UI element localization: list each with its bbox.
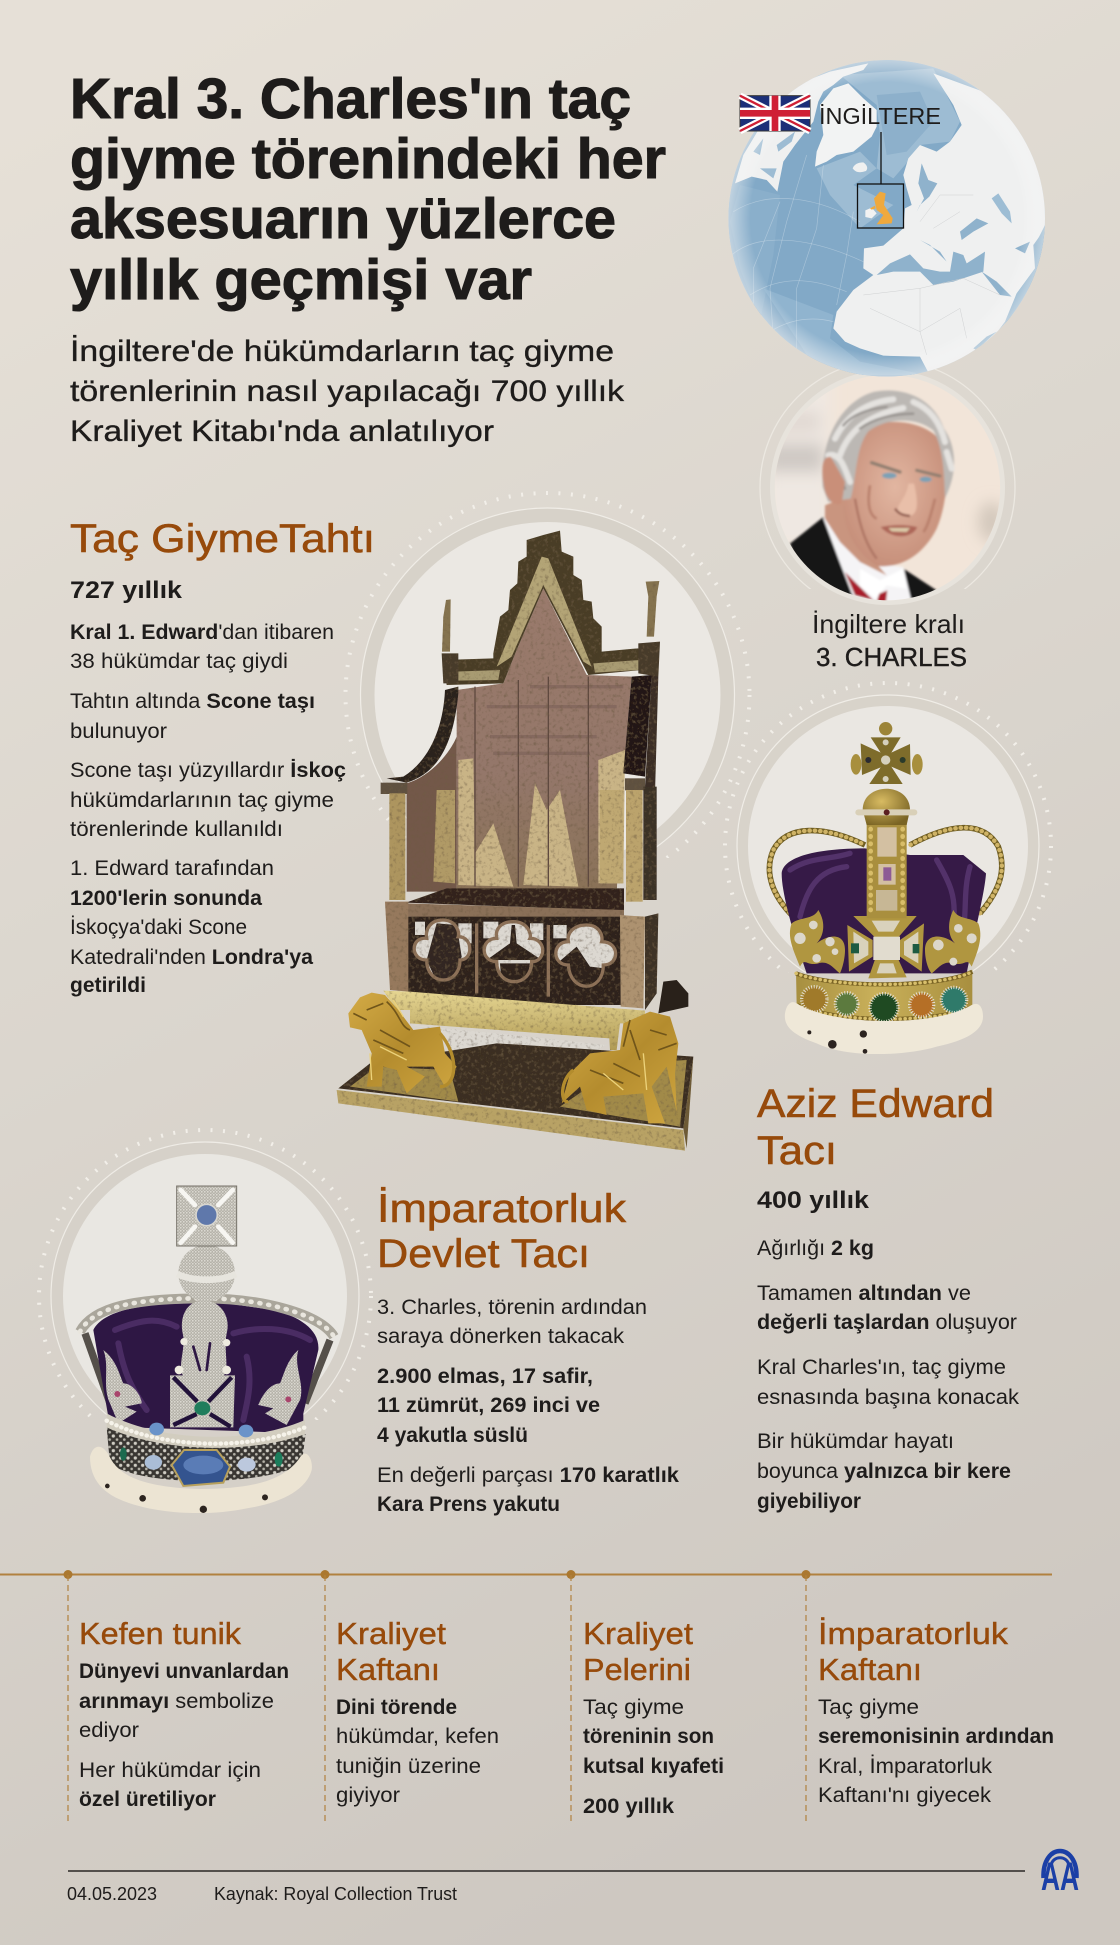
panel: Kefen tunik [79,1616,289,1811]
panel: Kraliyet Kaftanı: tuniğin üzerine [336,1755,481,1778]
text block: throne facts: Kral 1. Edward'dan itibaren [70,621,334,644]
text block: throne facts: Katedrali'nden Londra'ya [70,946,313,969]
heading: St Edward [757,1082,994,1173]
panel: St Edward crown backdrop [725,683,1051,1009]
text block: St Edward facts: Tamamen altından ve [757,1282,971,1305]
panel: Kraliyet Kaftanı: Kaftanı [336,1652,440,1687]
panel: Kraliyet Pelerini: Taç giyme [583,1696,684,1719]
text block: throne facts: 1. Edward tarafından [70,857,274,880]
age: St Edward: 400 yıllık [757,1187,870,1214]
text block: throne facts: Tahtın altında Scone taşı [70,690,315,713]
title: Kral 3. Charles'ın taç [70,67,631,131]
map label: İNGİLTERE [819,103,941,129]
subtitle: törenlerinin nasıl yapılacağı 700 yıllık [70,375,625,408]
panel: Kraliyet Kaftanı: Kraliyet [336,1616,446,1651]
panel: Kraliyet Kaftanı: Dini törende [336,1696,457,1719]
icon: AA logo: AA [1041,1855,1079,1899]
panel: Kraliyet Pelerini: Kraliyet [583,1616,693,1651]
panel: İmparatorluk Kaftanı: Kral, İmparatorluk [818,1755,993,1778]
map callout box [858,132,904,228]
text block: Imperial crown facts: 11 zümrüt, 269 inci ve [377,1394,600,1417]
text block: throne facts: bulunuyor [70,720,167,743]
text block: St Edward facts: giyebiliyor [757,1490,861,1513]
subtitle: Kraliyet Kitabı'nda anlatılıyor [70,415,494,448]
panel: İmparatorluk Kaftanı: Kaftanı [818,1652,922,1687]
text block: Imperial crown facts: 3. Charles, törenin ardından [377,1296,647,1319]
text block: throne facts: 1200'lerin sonunda [70,887,262,910]
portrait caption: 3. CHARLES [816,642,967,672]
text block: throne facts: İskoçya'daki Scone [70,916,247,939]
panel: İmparatorluk Kaftanı [818,1616,1054,1807]
panel: Kraliyet Pelerini: 200 yıllık [583,1795,674,1818]
heading: Imperial crown [377,1186,627,1276]
panel: Imperial crown backdrop [37,1128,373,1420]
heading: St Edward: Tacı [757,1129,837,1173]
title: aksesuarın yüzlerce [70,187,616,251]
portrait caption: İngiltere kralı [812,609,965,639]
panel: Kraliyet Pelerini: töreninin son [583,1725,714,1748]
heading: throne: Taç GiymeTahtı [70,517,375,561]
timeline rule [0,1570,1052,1821]
text block: throne facts: Scone taşı yüzyıllardır İskoç [70,759,346,782]
icon: UK flag [740,96,810,131]
text block: St Edward facts: değerli taşlardan oluşuyor [757,1311,1017,1334]
title: giyme törenindeki her [70,127,666,191]
text block: throne facts: 38 hükümdar taç giydi [70,650,288,673]
text block: throne facts: törenlerinde kullanıldı [70,818,283,841]
panel: İmparatorluk Kaftanı: Kaftanı'nı giyecek [818,1784,992,1807]
text block: throne facts [70,621,346,997]
illustration: coronation throne [337,531,693,1151]
footer [67,1871,1025,1904]
panel: İmparatorluk Kaftanı: Taç giyme [818,1696,919,1719]
panel: St Edward text [757,1082,1020,1513]
age: throne: 727 yıllık [70,577,183,604]
panel: Kefen tunik: Kefen tunik [79,1616,242,1651]
portrait: King Charles [776,376,1000,600]
panel: throne text [70,517,375,997]
text block: Imperial crown facts: 2.900 elmas, 17 safir, [377,1365,593,1388]
panel: Kraliyet Pelerini: Pelerini [583,1652,691,1687]
text block: St Edward facts: esnasında başına konacak [757,1386,1020,1409]
lions [348,980,688,1123]
text block: St Edward facts: Bir hükümdar hayatı [757,1430,954,1453]
text block: St Edward facts [757,1237,1020,1513]
panel: Kefen tunik: arınmayı sembolize [79,1690,274,1713]
text block: Imperial crown facts: saraya dönerken takacak [377,1325,625,1348]
panel: İmparatorluk Kaftanı: seremonisinin ardından [818,1725,1054,1748]
subtitle: İngiltere'de hükümdarların taç giyme [70,335,614,368]
text block: Imperial crown facts: En değerli parçası 170 karatlık [377,1464,679,1487]
heading: St Edward: Aziz Edward [757,1082,994,1126]
portrait caption [812,609,967,672]
panel: throne backdrop [346,493,750,897]
panel: Kraliyet Kaftanı: giyiyor [336,1784,400,1807]
portrait rings [760,360,1015,615]
text block: St Edward facts: boyunca yalnızca bir kere [757,1460,1011,1483]
panel: Imperial crown text [377,1186,679,1516]
footer: 04.05.2023 [67,1884,157,1904]
text block: throne facts: getirildi [70,974,146,997]
panel: İmparatorluk Kaftanı: İmparatorluk [818,1616,1009,1651]
panel: Kefen tunik: ediyor [79,1719,139,1742]
text block: St Edward facts: Kral Charles'ın, taç giyme [757,1356,1006,1379]
text block: Imperial crown facts [377,1296,679,1516]
footer: Kaynak: Royal Collection Trust [214,1884,457,1904]
illustration: Imperial State Crown [80,1186,334,1513]
globe map [728,60,1050,377]
icon: AA logo [1041,1851,1079,1899]
text block: St Edward facts: Ağırlığı 2 kg [757,1237,874,1260]
heading: Imperial crown: İmparatorluk [377,1186,627,1231]
text block: throne facts: hükümdarlarının taç giyme [70,789,334,812]
panel: Kraliyet Kaftanı: hükümdar, kefen [336,1725,499,1748]
title: yıllık geçmişi var [70,248,532,312]
panel: Kefen tunik: Dünyevi unvanlardan [79,1660,289,1683]
panel: Kefen tunik: Her hükümdar için [79,1759,261,1782]
text block: Imperial crown facts: 4 yakutla süslü [377,1424,528,1447]
panel: Kraliyet Kaftanı [336,1616,499,1807]
text block: Imperial crown facts: Kara Prens yakutu [377,1493,560,1516]
heading: Imperial crown: Devlet Tacı [377,1232,590,1276]
panel: Kefen tunik: özel üretiliyor [79,1788,216,1811]
panel: Kraliyet Pelerini [583,1616,724,1818]
title [70,67,666,312]
illustration: St Edward's Crown [769,722,1002,1054]
subtitle [70,335,625,448]
panel: Kraliyet Pelerini: kutsal kıyafeti [583,1755,724,1778]
